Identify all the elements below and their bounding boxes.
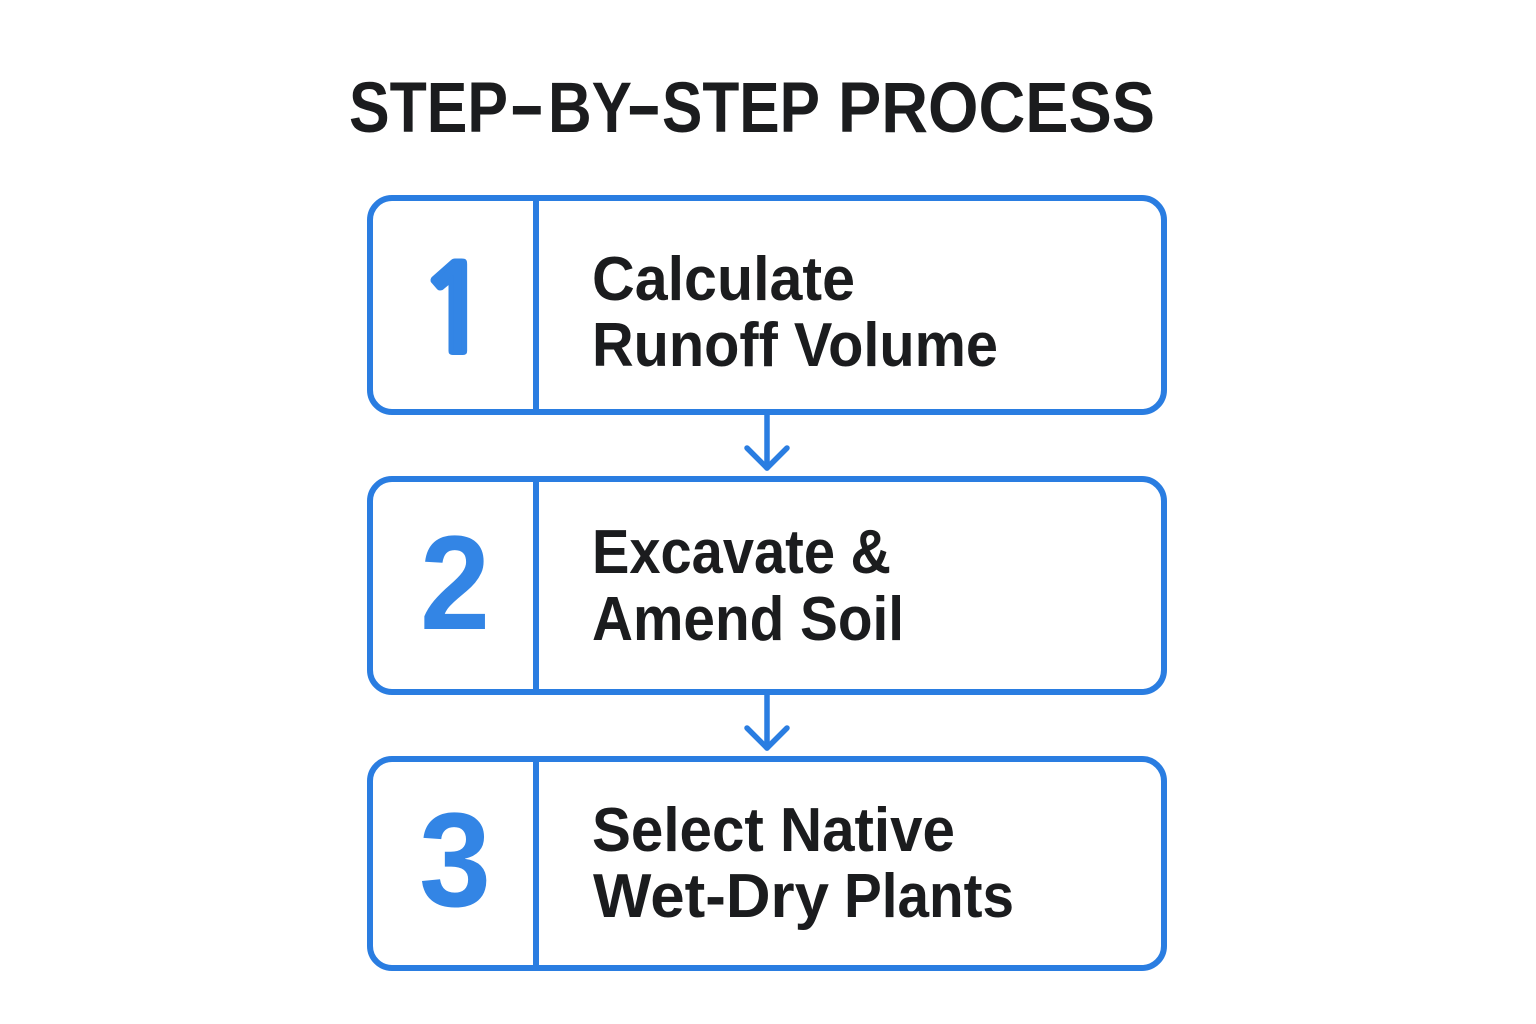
step 3 text: Wet-Dry [593,862,830,931]
title: BY [548,69,632,148]
arrow: step 1 to step 2 [747,415,787,468]
title: PROCESS [838,69,1155,148]
title: - [626,66,662,145]
arrow: step 2 to step 3 [747,695,787,748]
step 3 number: 3 [419,786,491,935]
step 2 text: Excavate & [592,518,891,587]
step 1 number: 1 [417,251,493,370]
step 1 text: Runoff Volume [592,311,998,380]
step 3 text [592,796,1014,931]
title [349,66,1155,148]
step 2 divider [533,479,539,692]
panel: step 2 [370,479,1164,692]
title: - [509,66,545,145]
step 3 text: Plants [844,862,1014,931]
step 3 text: Select Native [592,796,955,865]
step 1 box [370,198,1164,412]
step 3 box [370,759,1164,968]
step 2 text: Amend Soil [592,585,904,654]
step 1 text [592,245,998,380]
panel: step 1 [370,198,1164,412]
step 2 text [592,518,904,654]
title: STEP [349,69,508,148]
step 1 divider [533,198,539,412]
step 2 box [370,479,1164,692]
step 3 divider [533,759,539,968]
panel: step 3 [370,759,1164,968]
title: STEP [662,69,820,148]
step 1 text: Calculate [592,245,855,314]
step 2 number: 2 [420,509,490,658]
